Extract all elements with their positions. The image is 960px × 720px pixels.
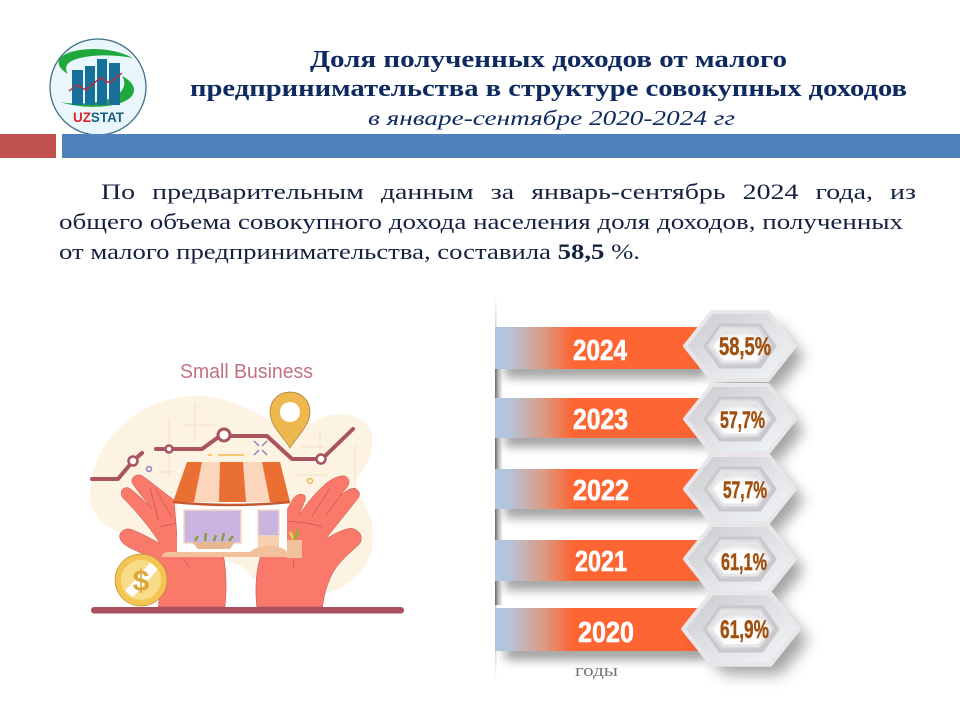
label: Small Business: Small Business — [180, 361, 313, 383]
left hand — [120, 475, 226, 607]
title: Доля полученных доходов от малого — [310, 47, 787, 73]
row 2024: 58,5% — [719, 333, 771, 361]
row 2020 — [495, 593, 808, 674]
row 2020: 2020 — [578, 617, 634, 649]
axis caption: годы — [575, 661, 619, 680]
row 2022: 2022 — [573, 475, 629, 507]
row 2021: 2021 — [575, 546, 627, 578]
axis line — [495, 300, 503, 680]
row 2024 — [495, 312, 804, 389]
intro text: от малого предпринимательства, составила 58,5 %. — [59, 239, 640, 264]
trend line — [92, 429, 353, 484]
row 2022 — [495, 455, 804, 532]
icon: coin — [115, 554, 167, 606]
row 2023 — [495, 385, 804, 462]
background blob — [90, 396, 373, 597]
intro text — [59, 179, 916, 264]
chart: share by year — [495, 300, 808, 680]
title: в январе-сентябре 2020-2024 гг — [368, 106, 735, 130]
intro text: общего объема совокупного дохода населения доля доходов, полученных — [59, 209, 903, 234]
row 2023: 2023 — [573, 404, 628, 436]
ground bar — [91, 607, 404, 614]
logo: UZSTAT: UZSTAT — [73, 109, 124, 125]
row 2023: 57,7% — [720, 407, 765, 434]
icon: coin: $ — [133, 565, 150, 598]
title: предпринимательства в структуре совокупных доходов — [190, 76, 907, 102]
illustration: small business — [90, 361, 404, 614]
header band — [0, 134, 960, 158]
right hand — [256, 476, 361, 607]
title — [190, 47, 907, 130]
intro text: По предварительным данным за январь-сентябрь 2024 года, из — [101, 179, 916, 204]
row 2020: 61,9% — [720, 616, 769, 644]
logo: UZSTAT — [50, 39, 146, 135]
row 2021 — [495, 525, 804, 602]
icon: location pin — [270, 392, 310, 448]
row 2022: 57,7% — [723, 477, 767, 504]
row 2024: 2024 — [573, 335, 627, 367]
shop — [162, 462, 302, 558]
row 2021: 61,1% — [721, 549, 767, 576]
